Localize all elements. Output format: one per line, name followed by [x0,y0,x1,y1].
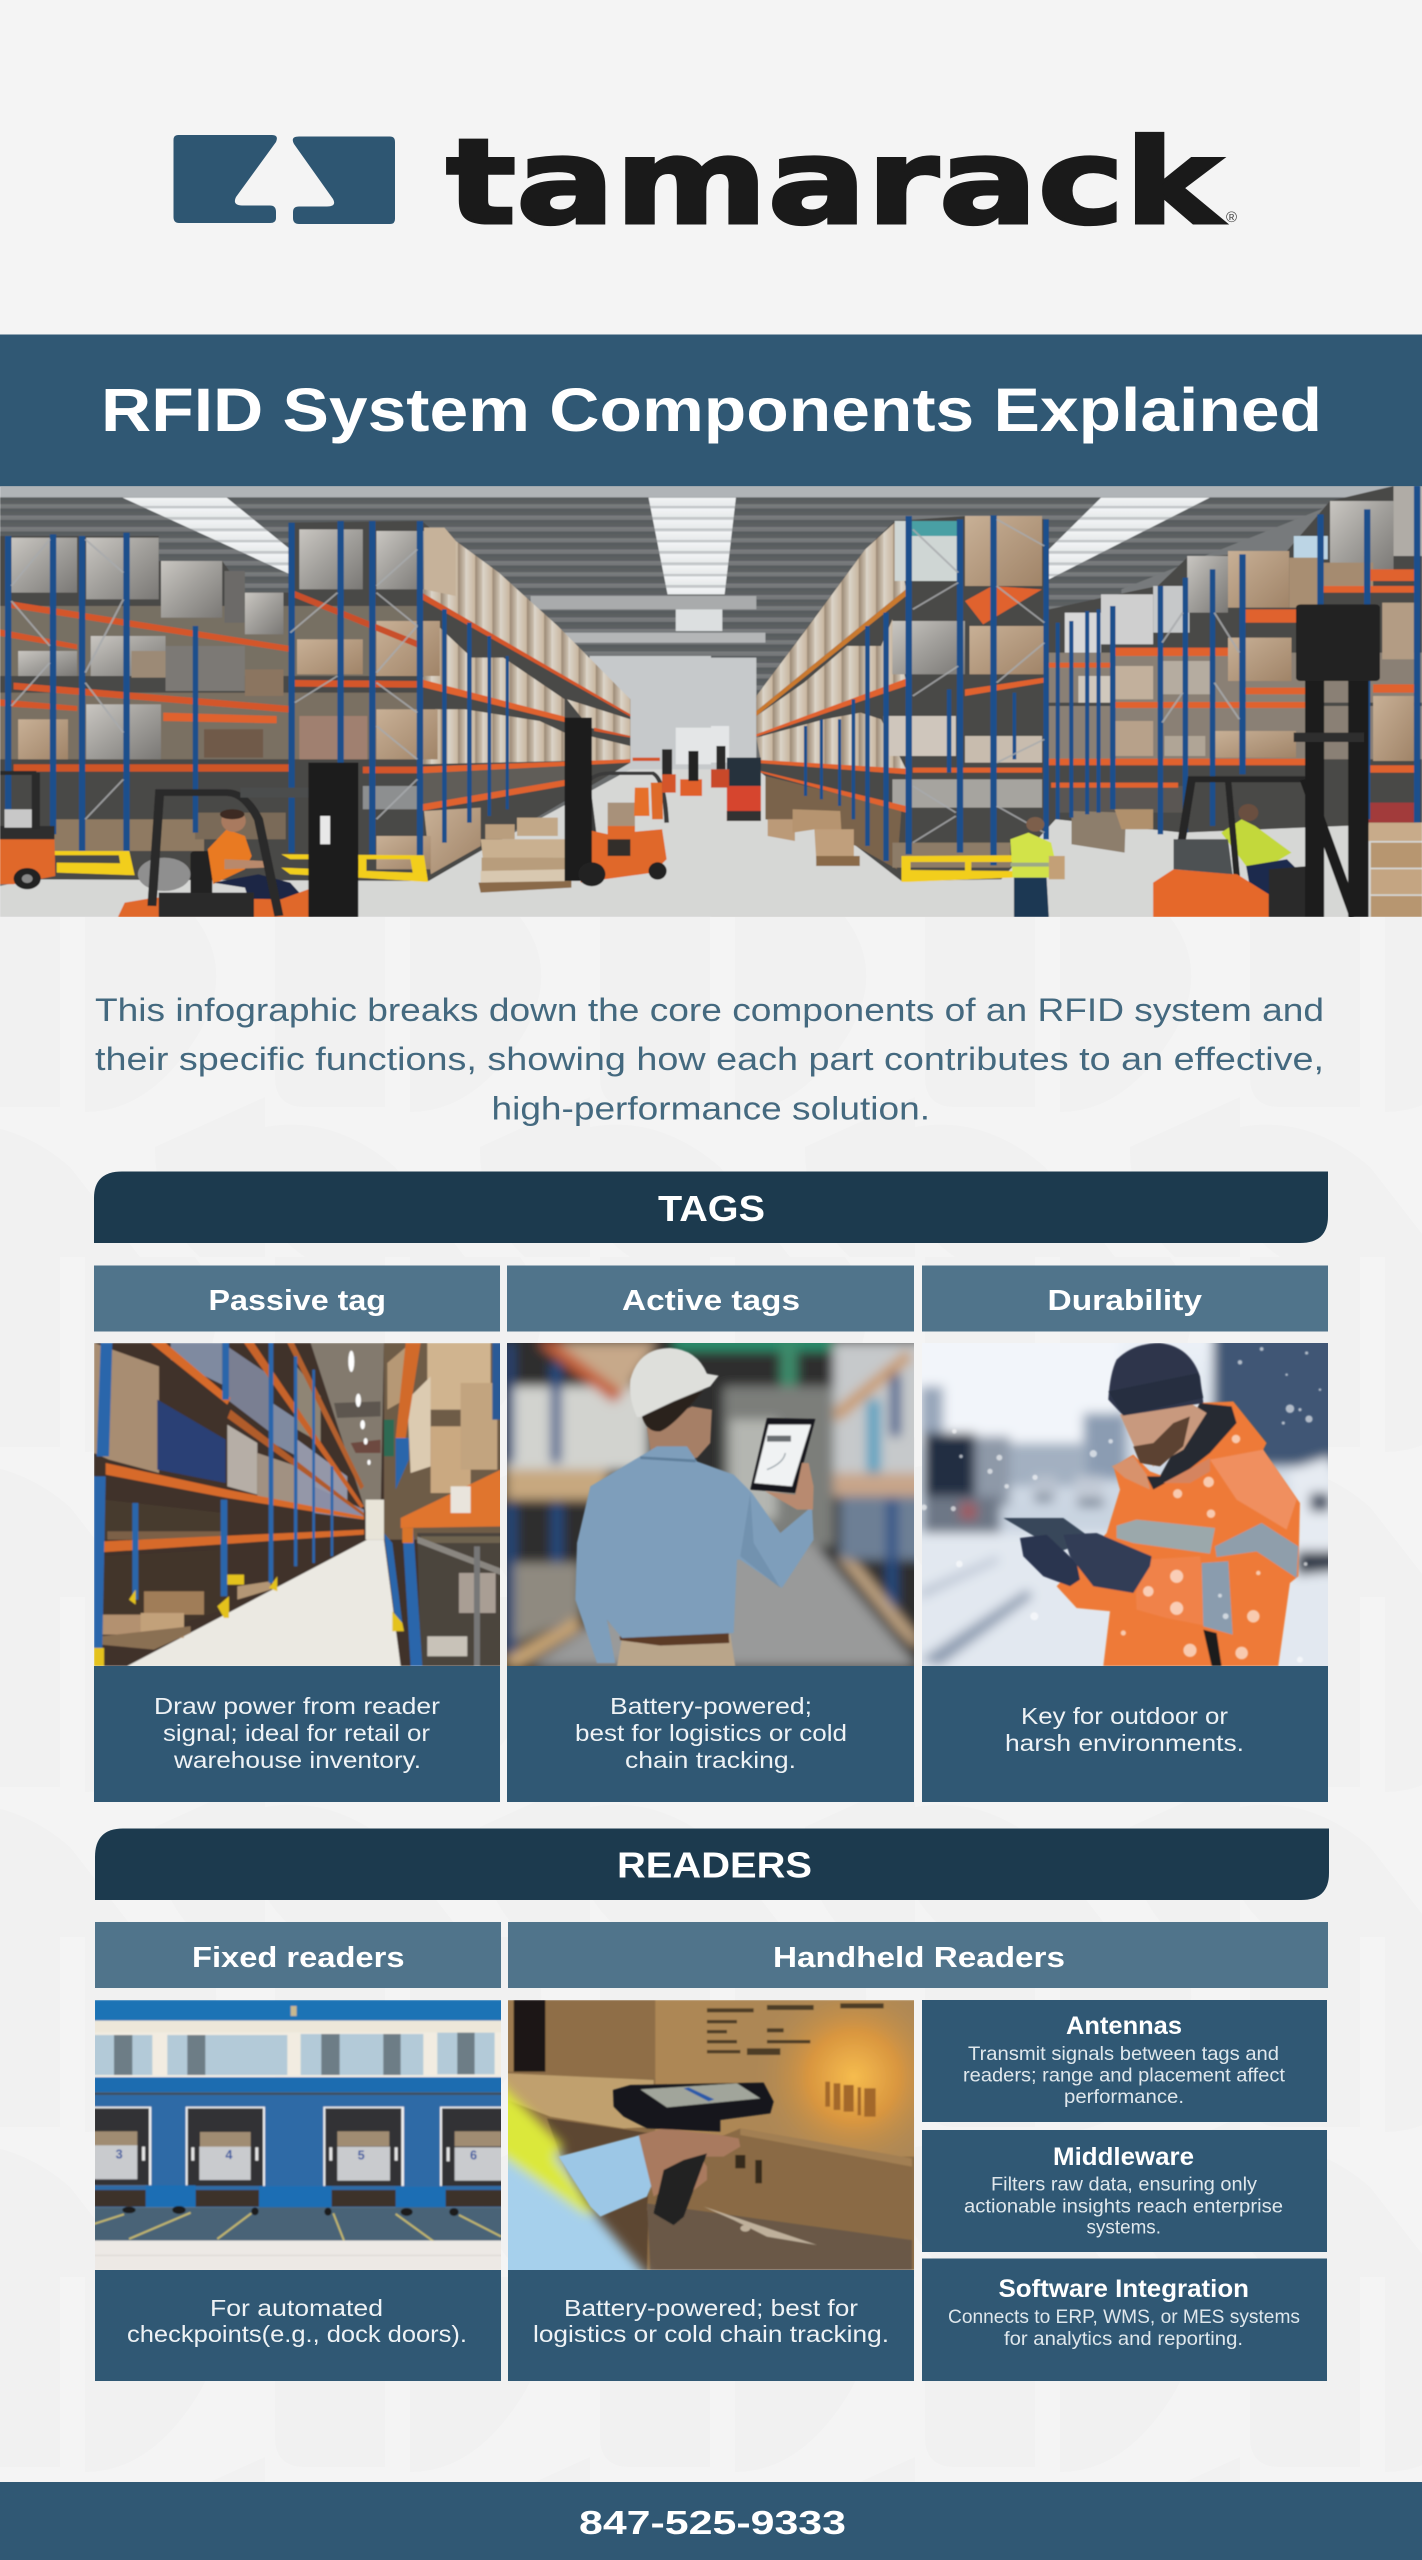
description: For automated [210,2295,383,2321]
section heading: tags: TAGS [658,1188,765,1229]
column: passive tag [94,1266,504,1802]
description: Draw power from reader [154,1693,440,1719]
description [94,1666,500,1802]
card: antennas: Antennas [1066,2012,1182,2040]
wordmark: tamarack [446,113,1225,251]
section heading: readers [95,1828,1329,1900]
intro paragraph: This infographic breaks down the core components of an RFID system and [95,992,1324,1028]
column: durability [907,1266,1347,1802]
description: Battery-powered; [610,1693,812,1719]
footer: phone number [0,2482,1422,2560]
photo: warehouse aisle [94,1343,504,1666]
card: software integration: Software Integration [998,2275,1249,2303]
card: middleware: Middleware [1053,2143,1194,2171]
card: middleware: Filters raw data, ensuring only [991,2174,1257,2196]
title: RFID System Components Explained [101,376,1322,444]
description: signal; ideal for retail or [163,1720,430,1746]
card: antennas [922,2000,1327,2122]
column heading: Handheld Readers [773,1942,1065,1974]
card: middleware: systems. [1086,2216,1161,2238]
card: software integration: Connects to ERP, WMS, or MES systems [948,2306,1300,2328]
description [95,2270,501,2381]
intro paragraph: high-performance solution. [492,1090,930,1126]
description: chain tracking. [625,1747,796,1773]
registered mark: ® [1226,209,1237,226]
description [507,1666,914,1802]
photo: loading dock doors: 3 [116,2148,123,2162]
intro paragraph [95,992,1324,1126]
photo: loading dock doors: 5 [358,2148,365,2162]
column heading: Passive tag [208,1285,386,1317]
card: antennas: Transmit signals between tags and [968,2043,1279,2065]
description: logistics or cold chain tracking. [533,2321,889,2347]
column heading: Durability [1048,1285,1202,1317]
column: active tags [494,1266,930,1802]
intro paragraph: their specific functions, showing how each part contributes to an effective, [95,1041,1324,1077]
column: handheld readers [494,1922,1328,2381]
description: best for logistics or cold [575,1720,847,1746]
description [508,2270,914,2381]
section heading: readers: READERS [617,1844,812,1886]
description: checkpoints(e.g., dock doors). [127,2321,467,2347]
column heading [922,1266,1328,1332]
photo: handheld RFID scanner at cartons [494,2000,917,2283]
photo: worker in snow with tablet [922,1343,1328,1666]
card: middleware [922,2130,1327,2252]
logo: tamarack [174,113,1237,251]
photo: loading dock doors [94,2000,504,2271]
background pattern [0,917,1422,2482]
description: warehouse inventory. [173,1747,421,1773]
description: Battery-powered; best for [564,2295,858,2321]
card: software integration [922,2258,1327,2381]
column heading [508,1922,1328,1988]
column heading: Fixed readers [192,1942,404,1974]
card: antennas: performance. [1064,2086,1184,2108]
column heading: Active tags [622,1285,800,1317]
column: fixed readers [94,1922,504,2381]
footer: phone number: 847-525-9333 [579,2504,846,2541]
description [922,1666,1328,1802]
panel: readers [94,1828,1329,2381]
hero photo: warehouse aisle with forklifts [0,486,1422,917]
column heading [95,1922,501,1988]
column heading [94,1266,500,1332]
photo: loading dock doors: 4 [225,2148,232,2162]
photo: man with tablet and hard hat [507,1343,914,1666]
description: Key for outdoor or [1021,1703,1228,1729]
icon: tamarack tree mark [174,135,395,224]
section heading: tags [94,1172,1328,1243]
card: middleware: actionable insights reach enterprise [964,2196,1283,2218]
description: harsh environments. [1005,1730,1244,1756]
panel: tags [94,1172,1347,1802]
column heading [507,1266,914,1332]
card: antennas: readers; range and placement affect [963,2064,1286,2086]
photo: loading dock doors: 6 [470,2149,477,2163]
title banner [0,334,1422,486]
card: software integration: for analytics and reporting. [1004,2328,1243,2350]
